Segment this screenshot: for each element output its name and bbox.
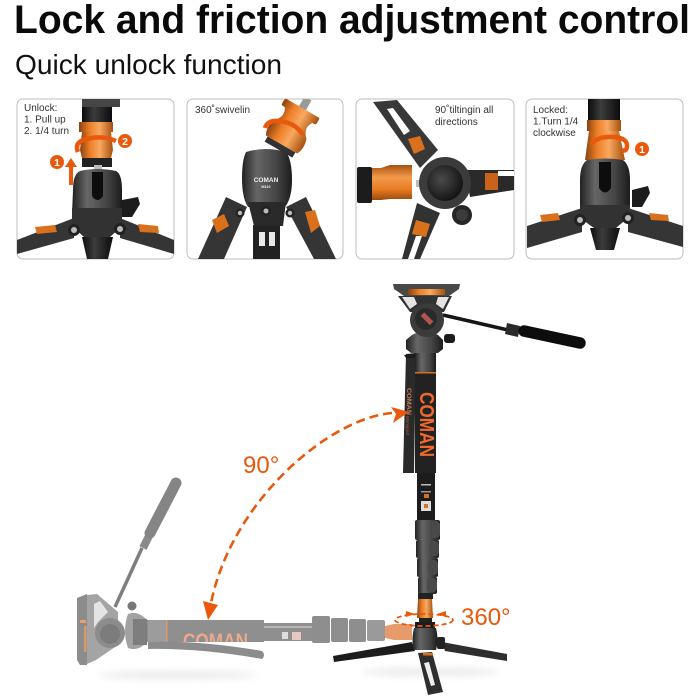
- panel: locked: [526, 99, 683, 259]
- head: [77, 594, 147, 665]
- strap: [148, 642, 264, 659]
- badge 2: 2: [122, 136, 128, 148]
- tube: [264, 623, 312, 641]
- tripod base: [333, 622, 507, 695]
- strap: COMAN: [405, 388, 412, 415]
- ground shadow: [98, 669, 500, 678]
- subtitle: Quick unlock function: [15, 49, 282, 80]
- badge 1: 1: [54, 157, 60, 169]
- arrow: pull up: [65, 158, 77, 185]
- logo: [254, 177, 279, 189]
- column: [415, 353, 436, 473]
- caption: directions: [435, 117, 478, 128]
- panel: tilt: [356, 99, 514, 259]
- label: 90 degrees: 90°: [243, 452, 279, 479]
- badge 1: [50, 155, 64, 169]
- arrow: swivel rotate: [265, 121, 303, 135]
- label: 360 degrees: 360°: [461, 604, 511, 631]
- badge 2: [118, 134, 132, 148]
- carbon section: [148, 620, 168, 642]
- caption: 1.Turn 1/4: [533, 116, 579, 128]
- orange collar: [385, 624, 412, 640]
- caption: 2. 1/4 turn: [24, 126, 69, 137]
- panel: swivel: [187, 88, 343, 259]
- badge 1: [635, 142, 649, 156]
- lower tube: [417, 473, 435, 521]
- handle: [443, 315, 580, 343]
- logo: COMAN: [254, 177, 279, 184]
- caption: Locked:: [533, 105, 568, 116]
- arrow: rotate: [77, 137, 116, 152]
- brand text: COMAN: [183, 630, 248, 653]
- grip handle: [115, 483, 176, 607]
- arrow: 90 degree tilt: [203, 407, 409, 620]
- brand text: COMAN: [415, 392, 437, 457]
- panel: unlock: [17, 97, 174, 259]
- photo: locked base: [527, 99, 683, 250]
- photo: swivel head: [198, 88, 336, 259]
- strap: Monopod: [405, 416, 410, 435]
- caption: 90˚tiltingin all: [435, 105, 493, 116]
- caption: 1. Pull up: [24, 114, 66, 126]
- monopod, upright: [333, 284, 580, 695]
- faded monopod, lowered: [77, 483, 412, 665]
- column: [147, 620, 264, 642]
- badge 1: 1: [639, 144, 645, 156]
- leg locks: [415, 520, 440, 594]
- strap: [403, 353, 418, 473]
- caption: Unlock:: [24, 103, 57, 114]
- photo: top view: [357, 100, 514, 259]
- logo: M110: [261, 185, 271, 189]
- arrow: rotate clockwise: [591, 137, 627, 151]
- caption: 360˚swivelin: [195, 104, 250, 116]
- arrow: 360 rotation: [395, 611, 453, 626]
- collar: [417, 593, 433, 622]
- head plate: [393, 284, 460, 353]
- caption: clockwise: [533, 128, 576, 139]
- photo: unlocked base: [17, 97, 174, 259]
- locks: [312, 616, 385, 643]
